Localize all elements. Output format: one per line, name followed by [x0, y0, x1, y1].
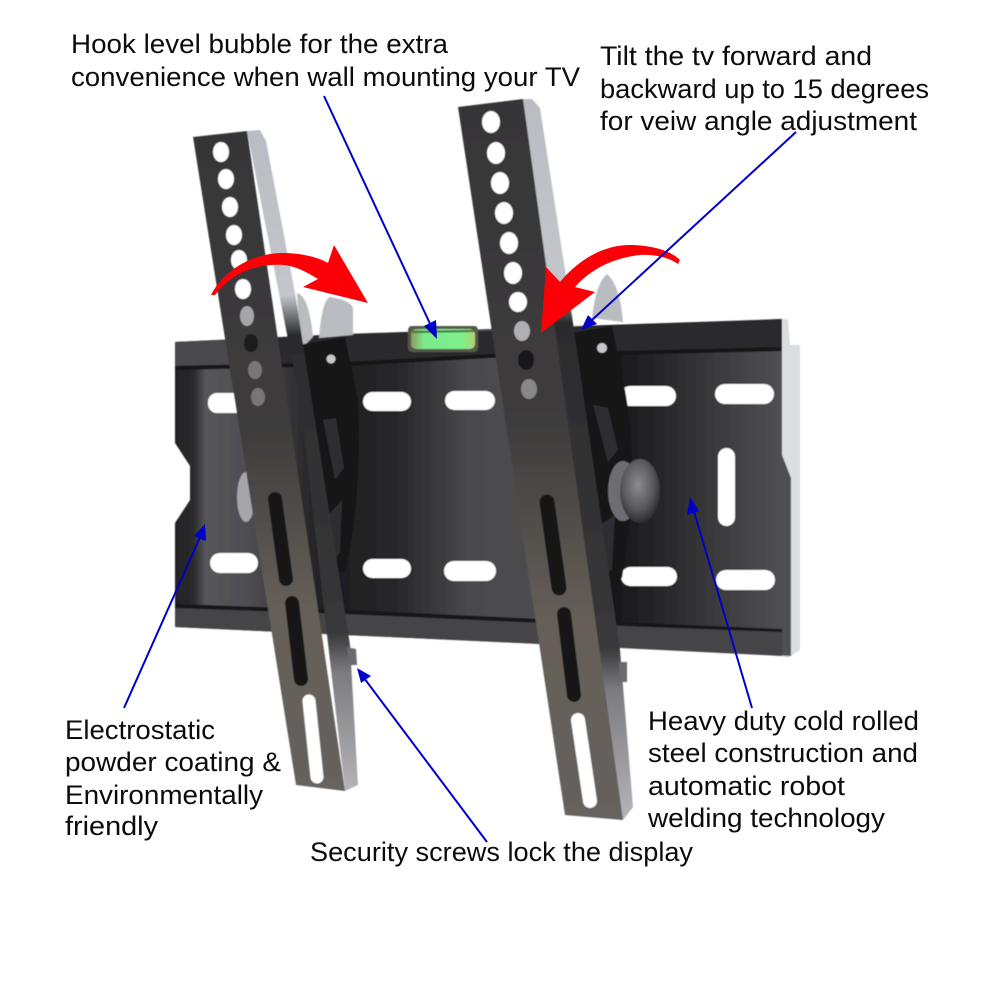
text: tilt callout: Tilt the tv forward and [600, 41, 872, 71]
light edge strip on the right of the plate [780, 319, 800, 658]
right arm slots [547, 502, 559, 588]
blue arrow to security screw [357, 668, 487, 842]
left arm security tab [347, 647, 357, 665]
left arm slots [275, 499, 286, 579]
text: powder coating callout: Environmentally [65, 780, 264, 810]
black tilt brackets [298, 326, 632, 585]
text: powder coating callout: Electrostatic [65, 715, 215, 745]
blue arrow to tilt hinge [581, 132, 796, 330]
left tilt knob [237, 472, 255, 522]
right tilt knob [608, 459, 660, 523]
tilt bracket grips [323, 405, 618, 576]
text: steel construction callout: welding technology [647, 803, 886, 833]
red tilt arrow right [541, 245, 680, 333]
text: security screws callout: Security screws lock the display [310, 837, 693, 867]
text: powder coating callout: friendly [65, 811, 159, 841]
plate mounting slots [208, 384, 775, 590]
text: tilt callout: for veiw angle adjustment [600, 106, 918, 136]
blue arrow to powder coated surface [124, 524, 206, 708]
hinge tabs [297, 274, 623, 350]
text: level bubble callout [71, 29, 580, 92]
left arm holes [213, 142, 265, 406]
back wall plate [175, 319, 791, 656]
wall mount product illustration [175, 99, 800, 820]
text: level bubble callout: Hook level bubble for the extra [71, 29, 449, 59]
text: steel construction callout: automatic robot [648, 771, 846, 801]
text: tilt callout [600, 41, 929, 136]
blue arrow to level bubble [324, 96, 437, 339]
red tilt arrow left [211, 245, 368, 303]
text: steel construction callout: Heavy duty cold rolled [648, 706, 919, 736]
left vertical arm [193, 130, 358, 791]
text: powder coating callout [65, 715, 281, 841]
text: tilt callout: backward up to 15 degrees [600, 74, 929, 104]
text: level bubble callout: convenience when wall mounting your TV [71, 62, 580, 92]
right arm security tab [619, 662, 627, 682]
text: powder coating callout: powder coating & [65, 747, 281, 777]
text: steel construction callout: steel construction and [648, 738, 918, 768]
blue arrow to steel plate [687, 497, 752, 708]
right arm holes [482, 111, 537, 399]
level bubble [408, 326, 478, 352]
text: steel construction callout [647, 706, 919, 833]
right vertical arm [458, 99, 633, 820]
screws [326, 354, 336, 364]
